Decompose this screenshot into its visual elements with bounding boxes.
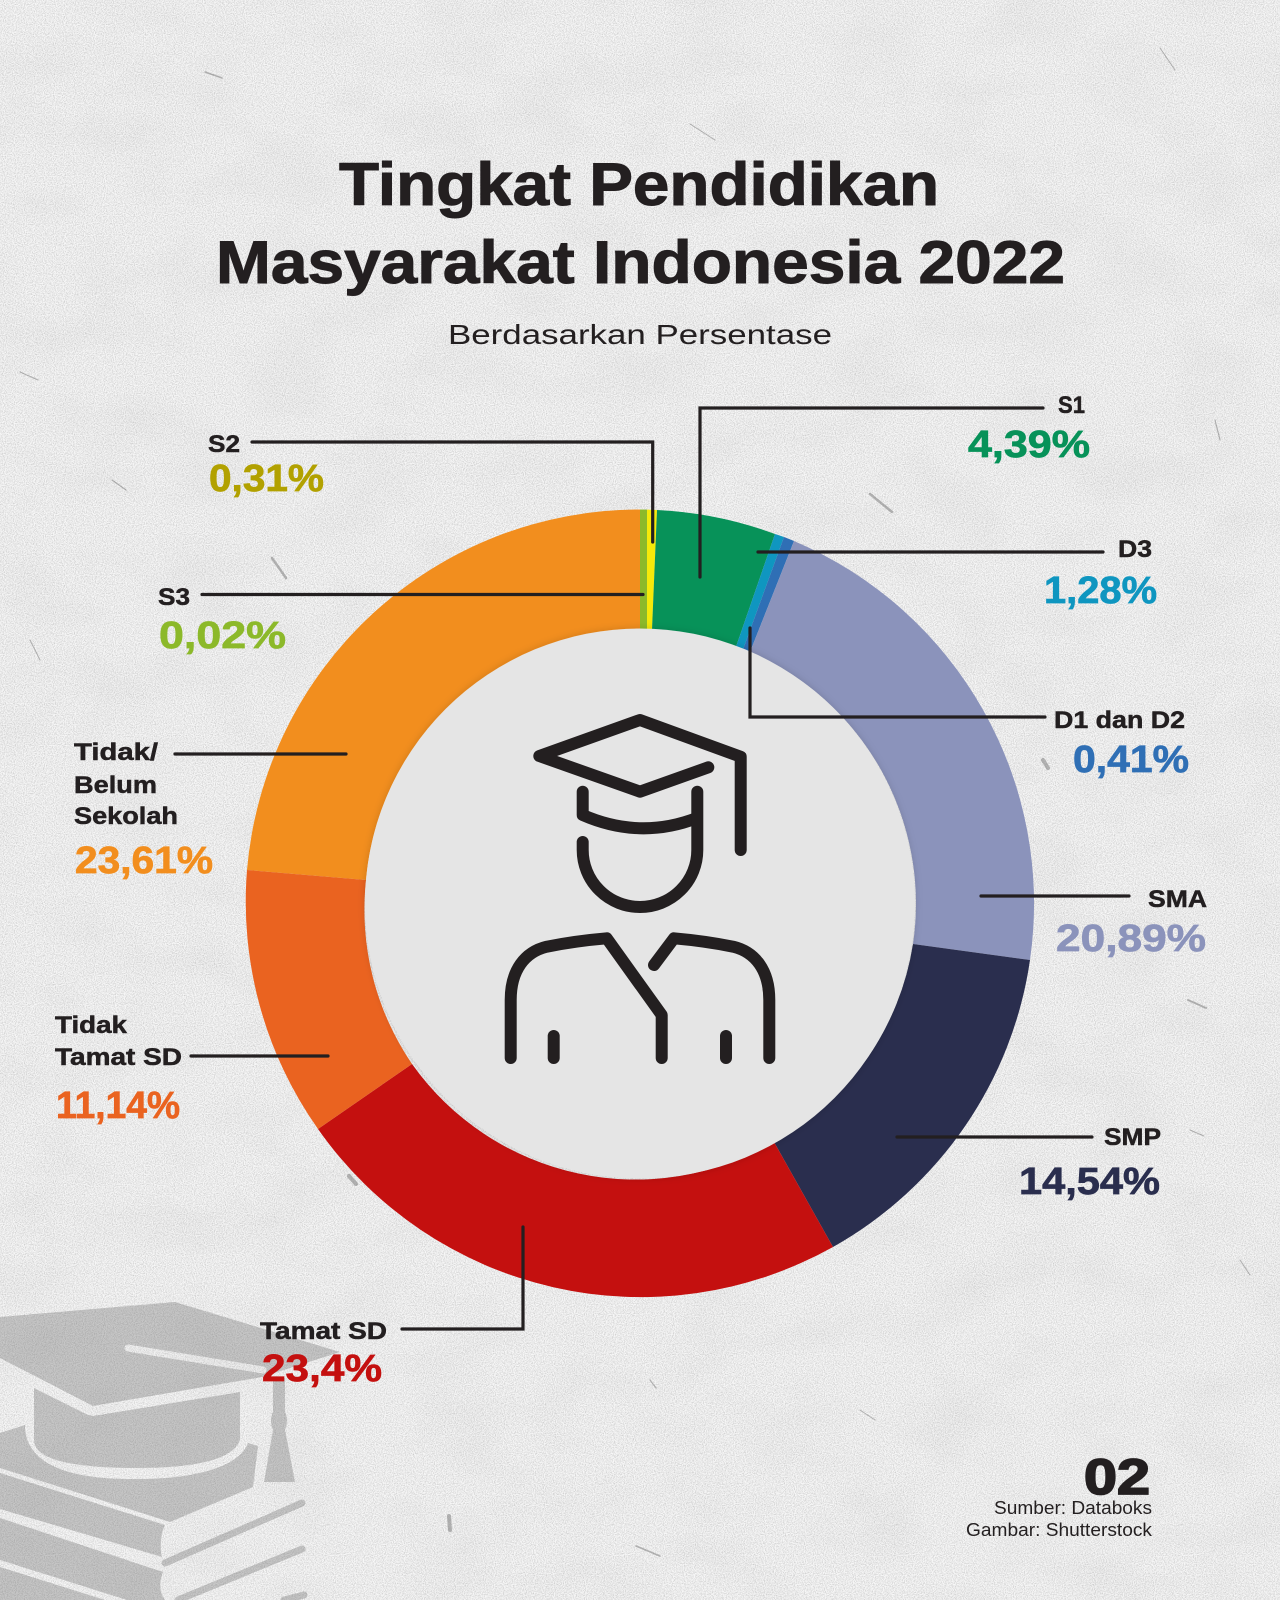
label: D1 dan D2: 0,41% [1073, 739, 1189, 781]
label: SMP [1019, 1124, 1161, 1203]
label: S2 [208, 431, 324, 500]
label: D3 [1044, 536, 1157, 612]
label: D1 dan D2: D1 dan D2 [1054, 707, 1185, 734]
label: S3: S3 [158, 584, 190, 611]
slice: Tamat SD [318, 1064, 833, 1297]
label: Tidak/Belum Sekolah: Tidak/ [74, 739, 158, 766]
label: Tidak Tamat SD: Tamat SD [55, 1044, 182, 1071]
label: S2: S2 [208, 431, 240, 458]
label: Tidak Tamat SD [55, 1012, 182, 1127]
label: S1: 4,39% [968, 424, 1090, 466]
slice: D1 dan D2 [743, 537, 794, 652]
slice: Tidak Tamat SD [246, 870, 412, 1129]
label: SMA: SMA [1148, 886, 1207, 913]
label: Tidak/Belum Sekolah: Belum [74, 772, 157, 799]
label: SMA: 20,89% [1056, 918, 1206, 960]
slice: Tidak/Belum Sekolah [247, 509, 640, 880]
label: Tamat SD [260, 1318, 387, 1390]
label: Tidak Tamat SD: Tidak [55, 1012, 127, 1039]
label: Tidak/Belum Sekolah: 23,61% [75, 840, 213, 882]
label: D3: D3 [1118, 536, 1152, 563]
page number: 02 [1084, 1449, 1150, 1505]
slice: SMA [750, 541, 1034, 960]
label: S3 [158, 584, 286, 657]
label: S2: 0,31% [209, 458, 324, 500]
title [216, 151, 1065, 296]
label: Tamat SD: 23,4% [262, 1348, 382, 1390]
label: S3: 0,02% [159, 615, 286, 657]
slice: S2 [647, 510, 657, 630]
label: D3: 1,28% [1044, 570, 1157, 612]
label: SMP: 14,54% [1019, 1161, 1160, 1203]
label: Tidak/Belum Sekolah: Sekolah [74, 803, 178, 830]
leader lines [175, 408, 1129, 1329]
label: S1 [968, 392, 1090, 466]
slice: S1 [652, 510, 775, 647]
label: Tidak/Belum Sekolah [74, 739, 213, 882]
label: Tamat SD: Tamat SD [260, 1318, 387, 1345]
title: Tingkat Pendidikan [339, 151, 939, 218]
slice: SMP [774, 944, 1030, 1247]
label: S1: S1 [1058, 392, 1085, 419]
label: SMA [1056, 886, 1207, 960]
donut chart [246, 509, 1034, 1297]
background illustration: graduation cap on books [0, 1302, 340, 1600]
label: D1 dan D2 [1054, 707, 1189, 781]
label: SMP: SMP [1104, 1124, 1161, 1151]
source credits: Gambar: Shutterstock [966, 1520, 1153, 1540]
slice: D3 [736, 534, 784, 650]
slice: S3 [640, 510, 647, 630]
source credits [966, 1498, 1153, 1540]
source credits: Sumber: Databoks [994, 1498, 1152, 1518]
label: Tidak Tamat SD: 11,14% [56, 1085, 180, 1127]
title: Masyarakat Indonesia 2022 [216, 229, 1065, 296]
center circle [365, 628, 915, 1178]
segment ring [246, 509, 1034, 1297]
icon: graduate [511, 720, 769, 1058]
subtitle: Berdasarkan Persentase [448, 319, 832, 350]
